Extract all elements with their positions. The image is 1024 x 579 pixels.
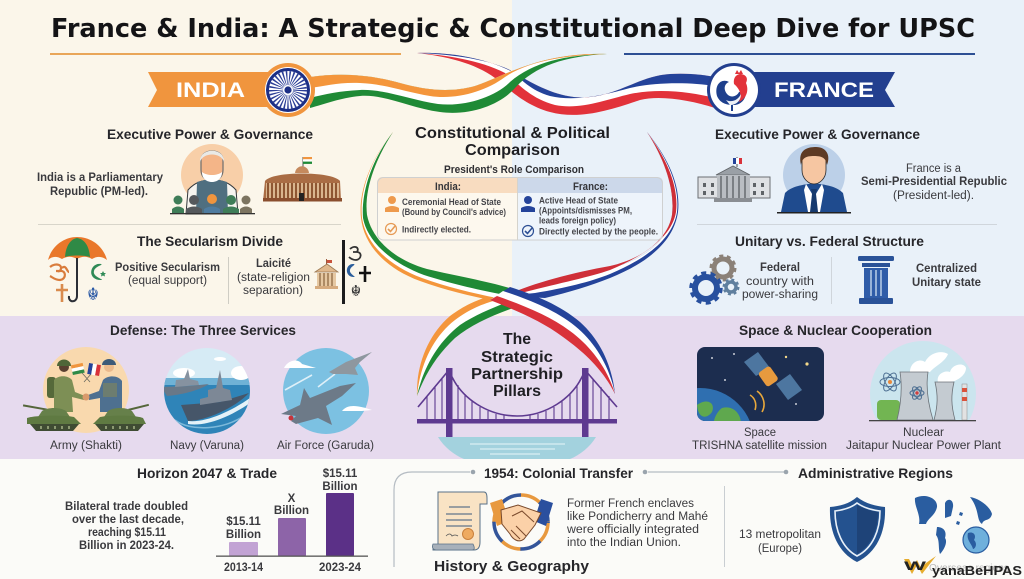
bar: middle <box>274 493 309 556</box>
ribbon: lower-left arc <box>417 297 519 396</box>
panel: History and Geography <box>432 465 708 575</box>
symbol: khanda: ☬ <box>87 285 99 305</box>
background: France side <box>512 0 1024 316</box>
icon: overseas territories <box>915 496 992 554</box>
text: positive secularism: (equal support) <box>128 275 207 287</box>
title rule: India <box>50 53 401 55</box>
panel: India executive power <box>37 126 342 214</box>
heading: Constitutional and Political Comparison: Constitutional & Political <box>415 125 610 142</box>
icon: handshake <box>490 495 553 549</box>
icon: Gallic rooster <box>707 63 761 117</box>
bar: middle: X <box>288 493 296 505</box>
icon: treaty scroll <box>432 492 487 550</box>
bar: 2013-14: Billion <box>226 529 261 541</box>
text: India ceremonial head: Ceremonial Head of State <box>402 197 501 208</box>
connector: timeline line <box>394 470 788 567</box>
table: role comparison <box>377 177 663 240</box>
text: France semi-presidential <box>861 163 1008 202</box>
bar: 2013-14: $15.11 <box>226 516 261 528</box>
heading: Executive Power and Governance (France): Executive Power & Governance <box>715 126 920 142</box>
text: directly elected: Directly elected by the people. <box>539 226 658 238</box>
symbol: cross <box>56 284 68 302</box>
text: former French enclaves: Former French enclaves <box>567 498 694 510</box>
text: positive secularism: Positive Secularism <box>115 262 220 274</box>
text: The Strategic Partnership Pillars: The <box>503 331 531 348</box>
icon: nuclear power plant <box>869 341 976 422</box>
panel: Defense <box>23 322 374 452</box>
text: France active head: Active Head of State <box>539 196 618 206</box>
title rule: France <box>624 53 975 55</box>
text: centralized unitary: Unitary state <box>912 277 981 289</box>
text: The Strategic Partnership Pillars: Partnership <box>471 366 563 383</box>
title: France & India: A Strategic & Constitutional Deep Dive for UPSC <box>51 14 975 44</box>
ribbon: upper-right arc <box>505 132 678 298</box>
text: France semi-presidential: (President-led). <box>893 190 974 202</box>
icon: gears <box>691 256 738 303</box>
heading: Constitutional and Political Comparison: Comparison <box>465 142 560 159</box>
icon: Elysee building <box>698 157 770 202</box>
text: centralized unitary <box>912 263 981 289</box>
heading: 1954 Colonial Transfer: 1954: Colonial Transfer <box>484 465 634 481</box>
heading: Space and Nuclear: Space & Nuclear Cooperation <box>739 322 932 338</box>
divider: bottom <box>724 486 725 567</box>
icon: French President <box>777 144 851 214</box>
heading: Administrative Regions: Administrative Regions <box>798 465 953 481</box>
icon: India head of state <box>385 196 399 212</box>
text: nuclear: Nuclear <box>903 427 944 439</box>
text: space: TRISHNA satellite mission <box>692 440 827 452</box>
icon: shield <box>830 497 885 562</box>
text: bilateral trade: reaching $15.11 <box>88 527 167 539</box>
text: positive secularism <box>115 262 220 287</box>
text: space: Space <box>744 427 776 439</box>
text: navy: Navy (Varuna) <box>170 440 244 452</box>
panel: Space and Nuclear <box>692 325 1001 452</box>
subheading: President's role: President's Role Comparison <box>444 164 584 176</box>
text: India parliamentary republic: India is a Parliamentary <box>37 172 164 184</box>
divider: unitary <box>831 257 832 304</box>
text: centralized unitary: Centralized <box>916 263 977 275</box>
text: nuclear <box>846 427 1002 452</box>
icon: pillar <box>858 256 894 304</box>
text: France active head: (Appoints/dismisses PM, <box>539 206 632 216</box>
text: federal country: Federal <box>760 262 800 274</box>
ribbon: India tricolour <box>310 54 607 113</box>
text: bilateral trade: Bilateral trade doubled <box>65 501 188 513</box>
watermark: W <box>904 559 927 573</box>
heading: Horizon 2047: Horizon 2047 & Trade <box>137 465 277 481</box>
text: bilateral trade: Billion in 2023-24. <box>79 540 174 552</box>
icon: water <box>438 437 596 459</box>
divider: France <box>697 224 997 225</box>
bar: 2023-24: $15.11 <box>323 468 358 480</box>
background: bottom band <box>0 459 1024 579</box>
text: federal country <box>742 262 818 301</box>
text: Laicite <box>237 258 310 297</box>
text: 13 metropolitan: 13 metropolitan <box>739 529 821 541</box>
panel: Horizon 2047 and Trade <box>65 465 368 574</box>
text: overseas regions: Overseas regions <box>929 562 1009 574</box>
icon: separated faith symbols <box>347 247 371 300</box>
axis labels: 2023-24 <box>319 562 362 574</box>
text: indirectly elected: Indirectly elected. <box>402 224 471 236</box>
icon: suspension bridge <box>417 368 617 437</box>
text: former French enclaves: into the Indian Union. <box>567 537 681 549</box>
background: purple band <box>0 316 1024 459</box>
icon: Ashoka Chakra <box>261 63 315 117</box>
separation bar <box>342 240 345 304</box>
watermark: yanaBeHPAS <box>932 563 1022 578</box>
icon: umbrella over faiths <box>48 237 107 305</box>
text: France active head: leads foreign policy) <box>539 216 616 226</box>
text: Laicite: Laicité <box>256 258 291 270</box>
ribbon: upper-left arc <box>361 132 530 301</box>
ribbon: France tricolour <box>417 53 715 115</box>
text: France active head <box>539 196 632 226</box>
bar chart: bilateral trade <box>216 468 368 574</box>
text: former French enclaves: like Pondicherry and Mahé <box>567 511 708 523</box>
panel: France executive power <box>698 126 1008 214</box>
text: The Strategic Partnership Pillars: Pillars <box>493 383 541 400</box>
banner label: INDIA: INDIA <box>176 79 245 102</box>
bar: 2013-14 <box>226 516 261 556</box>
heading: The Secularism Divide: The Secularism Divide <box>137 233 283 249</box>
panel: Unitary vs federal <box>691 233 981 304</box>
text: nuclear: Jaitapur Nuclear Power Plant <box>846 440 1002 452</box>
watermark <box>904 556 1022 578</box>
text: bilateral trade: over the last decade, <box>72 514 184 526</box>
text: federal country: country with <box>746 276 814 288</box>
axis labels <box>224 562 362 574</box>
panel: Strategic partnership pillars <box>417 331 617 459</box>
text: Laicite: separation) <box>243 285 303 297</box>
axis labels: 2013-14 <box>224 562 264 574</box>
text: former French enclaves: were officially integrated <box>566 524 699 536</box>
table header: India: India: <box>435 181 461 193</box>
text: army: Army (Shakti) <box>50 440 122 452</box>
icon: army handshake with tanks <box>23 347 149 433</box>
heading: Defense: Defense: The Three Services <box>110 322 296 338</box>
text: 13 metropolitan: (Europe) <box>758 543 802 555</box>
icon: air force jets <box>281 348 372 434</box>
text: India ceremonial head <box>402 197 506 218</box>
text: former French enclaves <box>566 498 708 549</box>
banner: France <box>707 63 895 117</box>
symbol: Om <box>50 264 69 280</box>
heading: Unitary vs Federal Structure: Unitary vs. Federal Structure <box>735 233 924 249</box>
text: Laicite: (state-religion <box>237 272 310 284</box>
heading: Executive Power and Governance (India): Executive Power & Governance <box>107 126 313 142</box>
icon: India check <box>386 224 396 234</box>
icon: state temple <box>315 259 338 289</box>
text: India ceremonial head: (Bound by Council's advice) <box>402 207 506 218</box>
icon: navy ships <box>161 348 251 436</box>
icon: separated faith symbols: ☬ <box>351 282 361 300</box>
heading: History and Geography: History & Geography <box>434 558 590 575</box>
banner label: FRANCE: FRANCE <box>774 79 874 102</box>
bar: 2023-24 <box>322 468 358 556</box>
text: The Strategic Partnership Pillars <box>471 331 563 400</box>
text: The Strategic Partnership Pillars: Strategic <box>481 349 553 366</box>
symbol: crescent and star <box>91 264 106 280</box>
bar: middle: Billion <box>274 505 309 517</box>
panel: Secularism divide <box>48 233 371 305</box>
icon: Indian Parliament building <box>263 157 342 202</box>
background: India side <box>0 0 512 316</box>
text: bilateral trade <box>65 501 188 552</box>
icon: France head of state <box>521 196 535 212</box>
icon: TRISHNA satellite over Earth <box>697 347 824 421</box>
icon: Prime Minister with cabinet <box>170 144 255 214</box>
text: India parliamentary republic <box>37 172 164 198</box>
banner: India <box>148 63 315 117</box>
ribbon: lower-right arc <box>490 287 615 394</box>
table header: France: France: <box>573 181 608 193</box>
text: space <box>692 427 827 452</box>
text: France semi-presidential: France is a <box>906 163 962 175</box>
panel: Administrative regions <box>739 465 1009 574</box>
text: France semi-presidential: Semi-Presidential Republic <box>861 176 1008 188</box>
panel: Constitutional comparison <box>377 125 663 240</box>
bar: 2023-24: Billion <box>322 481 358 493</box>
divider: India <box>38 224 341 225</box>
text: air force: Air Force (Garuda) <box>277 440 374 452</box>
text: India parliamentary republic: Republic (PM-led). <box>50 186 148 198</box>
divider: secularism <box>228 257 229 304</box>
icon: France check <box>522 226 534 236</box>
heading: Constitutional and Political Comparison <box>415 125 610 159</box>
text: 13 metropolitan <box>739 529 821 555</box>
text: federal country: power-sharing <box>742 289 818 301</box>
